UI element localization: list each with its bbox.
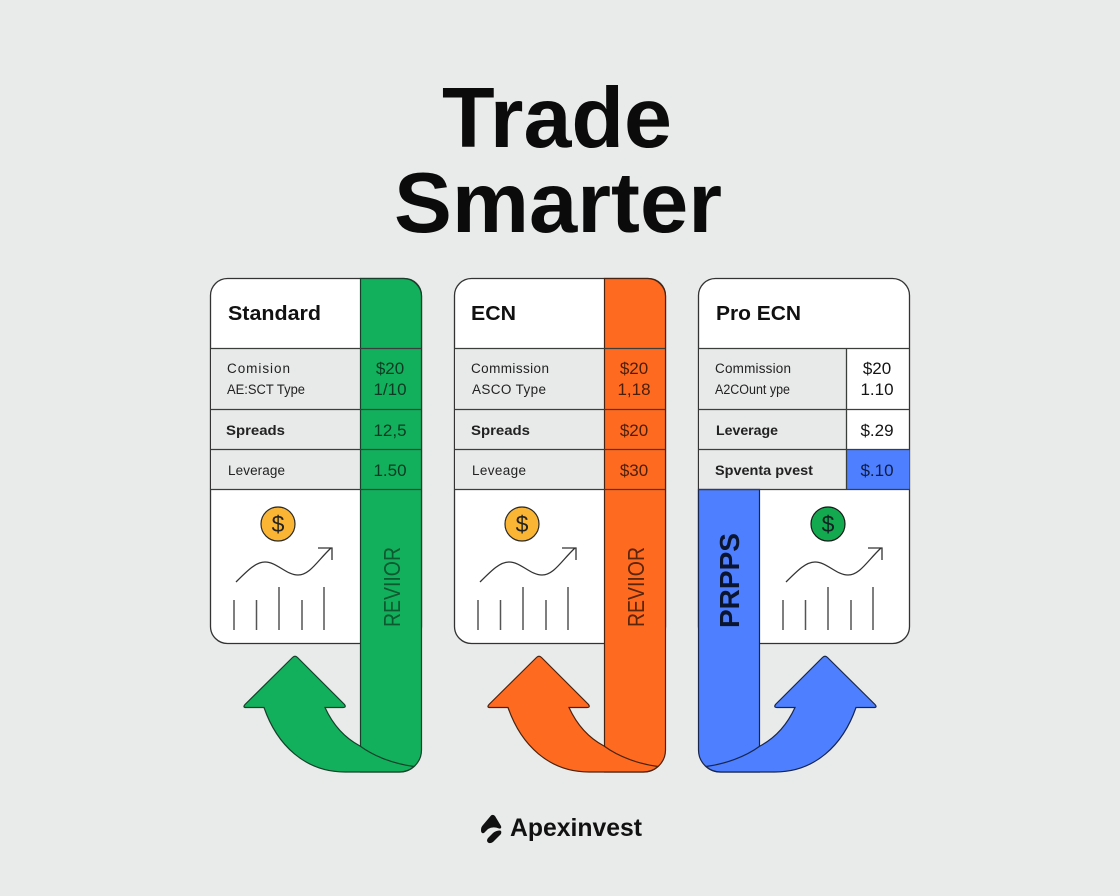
row values: $30 [620, 461, 648, 480]
icon: gold dollar coin [505, 507, 539, 541]
vertical label: REVIIOR [379, 547, 405, 627]
row values: $20 [376, 359, 404, 378]
arrow: green [244, 278, 422, 772]
brand name: Apexinvest [510, 814, 643, 842]
icon: apex mark [481, 815, 501, 843]
row values [373, 359, 407, 480]
row labels: Spreads [471, 422, 530, 438]
row values: $20 [863, 359, 891, 378]
highlighted value cell [846, 450, 910, 490]
row labels: Leveage [472, 463, 526, 478]
row values: 1.50 [373, 461, 407, 480]
icon: gold dollar coin [261, 507, 295, 541]
title: Trade [442, 71, 672, 166]
icon: green dollar coin: $ [822, 511, 835, 537]
panel: Standard [210, 278, 422, 772]
chart: growth line and bars [234, 548, 332, 630]
row values: $20 [620, 421, 648, 440]
heading: Standard: Standard [228, 303, 321, 325]
row values: $.29 [860, 421, 894, 440]
row values: 12,5 [373, 421, 407, 440]
row labels [471, 361, 549, 478]
logo: Apexinvest [481, 814, 643, 843]
row values [860, 359, 894, 480]
row labels: Comision [227, 361, 290, 376]
icon: gold dollar coin: $ [272, 511, 285, 537]
row values: 1.10 [860, 380, 894, 399]
row labels: Spventa pvest [715, 462, 813, 478]
row labels: AE:SCT Type [227, 382, 305, 397]
icon: gold dollar coin: $ [516, 511, 529, 537]
chart: growth line and bars [478, 548, 576, 630]
row labels: ASCO Type [472, 382, 546, 397]
heading: Pro ECN: Pro ECN [716, 303, 801, 325]
arrow: orange [488, 278, 666, 772]
row labels: Commission [471, 361, 549, 376]
icon: green dollar coin [811, 507, 845, 541]
row labels [226, 361, 305, 478]
panel: Pro ECN [698, 278, 910, 772]
heading: ECN: ECN [471, 303, 516, 325]
row labels: Commission [715, 361, 791, 376]
row labels [715, 361, 813, 478]
panel: ECN [454, 278, 666, 772]
arrow: blue [698, 490, 876, 772]
row labels: Spreads [226, 422, 285, 438]
vertical label: PRPPS [714, 533, 745, 628]
row labels: Leverage [228, 463, 285, 478]
vertical label: REVIIOR [623, 547, 649, 627]
row values: $.10 [860, 461, 894, 480]
row values: 1/10 [373, 380, 407, 399]
row values: 1,18 [617, 380, 651, 399]
row labels: A2COunt ype [715, 382, 790, 397]
title: Smarter [394, 156, 722, 251]
row labels: Leverage [716, 422, 778, 438]
row values: $20 [620, 359, 648, 378]
row values [617, 359, 651, 480]
title [394, 71, 722, 251]
chart: growth line and bars [783, 548, 882, 630]
